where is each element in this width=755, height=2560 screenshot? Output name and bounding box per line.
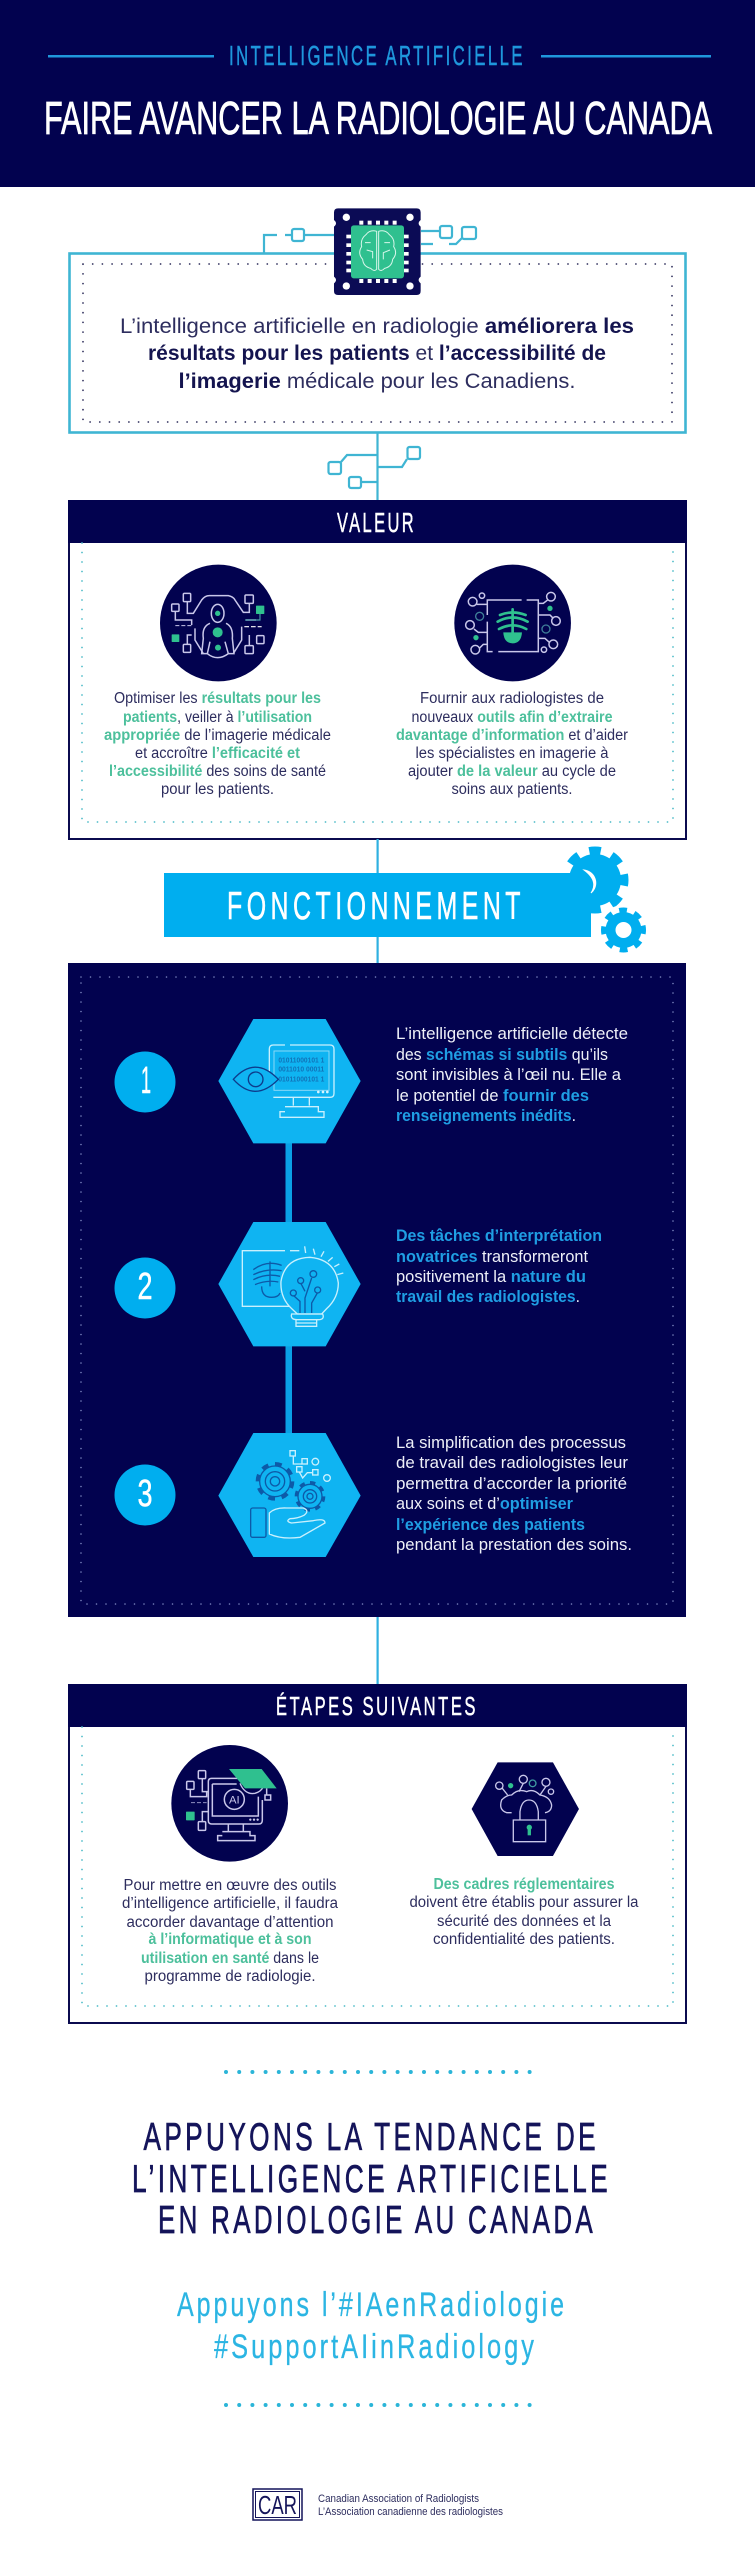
- hashtags: #SupportAIinRadiology: [214, 2328, 537, 2366]
- step 3 text: aux soins et d’optimiser: [396, 1494, 573, 1513]
- step 2 text: novatrices transformeront: [396, 1247, 588, 1266]
- step 1 text: sont invisibles à l’œil nu. Elle a: [396, 1065, 622, 1084]
- logo: Canadian Association of Radiologists: CAR: [258, 2490, 297, 2520]
- icon: AI chip with brain: [334, 208, 421, 295]
- eyebrow heading: INTELLIGENCE ARTIFICIELLE: [229, 40, 525, 71]
- step 2 text: positivement la nature du: [396, 1267, 586, 1286]
- étapes text left: Pour mettre en œuvre des outils: [124, 1877, 337, 1894]
- step 1 hexagon icon: 01011000101 1: [278, 1076, 324, 1083]
- step 2 text: Des tâches d’interprétation: [396, 1226, 602, 1245]
- step 3 number: [114, 1464, 176, 1526]
- step 3 text: de travail des radiologistes leur: [396, 1453, 628, 1472]
- call to action heading: [132, 2116, 611, 2242]
- step 1 hexagon icon: [218, 1019, 361, 1143]
- icon: x-ray with circuit: [454, 565, 571, 681]
- valeur text right: ajouter de la valeur au cycle de: [408, 763, 616, 780]
- step 3 text: [396, 1433, 632, 1554]
- icon: patient body with circuit: [160, 565, 277, 681]
- étapes text right: Des cadres réglementaires: [434, 1876, 614, 1893]
- fonctionnement banner with gears: [164, 851, 648, 955]
- step 3 text: permettra d’accorder la priorité: [396, 1474, 627, 1493]
- panel: valeur: [68, 500, 687, 839]
- step 3 hexagon icon: [218, 1433, 361, 1557]
- step 2 hexagon icon: [218, 1222, 361, 1346]
- étapes text right: sécurité des données et la: [437, 1913, 611, 1930]
- step 1 text: renseignements inédits.: [396, 1106, 576, 1125]
- intro panel: l’imagerie médicale pour les Canadiens.: [178, 369, 576, 393]
- étapes header bar: [68, 1684, 687, 1727]
- valeur text left: pour les patients.: [161, 781, 274, 798]
- icon: AI monitor with graduation cap: [171, 1745, 288, 1862]
- valeur text right: davantage d’information et d’aider: [396, 727, 628, 744]
- circuit connectors around chip: [264, 226, 476, 253]
- étapes text left: programme de radiologie.: [144, 1968, 316, 1985]
- step 1 text: L’intelligence artificielle détecte: [396, 1024, 628, 1043]
- hashtags: Appuyons l’#IAenRadiologie: [177, 2286, 567, 2324]
- valeur text right: les spécialistes en imagerie à: [416, 745, 609, 762]
- step 3 text: pendant la prestation des soins.: [396, 1535, 632, 1554]
- valeur text right: Fournir aux radiologistes de: [420, 690, 604, 707]
- panel: étapes suivantes: [68, 1684, 687, 2023]
- valeur text right: [396, 690, 628, 798]
- intro text: L’intelligence artificielle en radiologie améliorera les: [120, 314, 634, 338]
- header banner: [0, 0, 755, 187]
- valeur text left: [104, 690, 331, 798]
- étapes text left: utilisation en santé dans le: [141, 1950, 319, 1967]
- logo: Canadian Association of Radiologists: [253, 2489, 503, 2520]
- étapes text left: accorder davantage d’attention: [126, 1914, 334, 1931]
- icon: small gear: [604, 910, 643, 950]
- panel: fonctionnement: [68, 963, 686, 1617]
- step 1 number: 1: [141, 1060, 151, 1102]
- valeur text left: appropriée de l’imagerie médicale: [104, 727, 331, 744]
- icon: large gear: [566, 851, 624, 909]
- étapes text right: [410, 1876, 639, 1948]
- logo: Canadian Association of Radiologists: L’Association canadienne des radiologistes: [318, 2506, 503, 2518]
- fonctionnement heading: FONCTIONNEMENT: [227, 885, 525, 928]
- step 1 text: le potentiel de fournir des: [396, 1086, 589, 1105]
- connector line: [376, 839, 379, 963]
- valeur header bar: [68, 500, 687, 543]
- step 1 text: [396, 1024, 628, 1125]
- step 2 number: 2: [138, 1266, 152, 1308]
- step 3 text: La simplification des processus: [396, 1433, 626, 1452]
- étapes heading: ÉTAPES SUIVANTES: [276, 1691, 478, 1721]
- step 1 hexagon icon: 0011010 00011: [278, 1067, 324, 1074]
- étapes text right: doivent être établis pour assurer la: [410, 1894, 639, 1911]
- step 3 number: 3: [138, 1473, 152, 1515]
- logo: Canadian Association of Radiologists: Canadian Association of Radiologists: [318, 2493, 479, 2505]
- étapes text right: confidentialité des patients.: [433, 1931, 615, 1948]
- connector branches under intro panel: [328, 433, 420, 500]
- étapes text left: d’intelligence artificielle, il faudra: [122, 1895, 338, 1912]
- valeur text right: nouveaux outils afin d’extraire: [412, 709, 613, 726]
- connector line: [376, 1617, 379, 1684]
- valeur text left: Optimiser les résultats pour les: [114, 690, 321, 707]
- step 2 text: [396, 1226, 602, 1306]
- valeur text left: et accroître l’efficacité et: [135, 745, 300, 762]
- valeur heading: VALEUR: [337, 507, 416, 538]
- step 1 text: des schémas si subtils qu’ils: [396, 1045, 608, 1064]
- intro panel: [70, 254, 686, 432]
- étapes text left: [122, 1877, 338, 1985]
- step 2 number: [114, 1258, 176, 1318]
- hashtags: [177, 2286, 567, 2366]
- step 1 number: [114, 1052, 176, 1112]
- valeur text left: patients, veiller à l’utilisation: [123, 709, 312, 726]
- valeur text left: l’accessibilité des soins de santé: [109, 763, 326, 780]
- icon: AI monitor with graduation cap: AI: [229, 1795, 240, 1807]
- step 3 text: l’expérience des patients: [396, 1515, 585, 1534]
- step 1 hexagon icon: 01011000101 1: [278, 1058, 324, 1065]
- step 2 text: travail des radiologistes.: [396, 1287, 580, 1306]
- étapes text left: à l’informatique et à son: [148, 1931, 312, 1948]
- intro panel: résultats pour les patients et l’accessibilité de: [148, 341, 606, 365]
- valeur text right: soins aux patients.: [452, 781, 572, 798]
- icon: padlock with cloud: [472, 1762, 579, 1856]
